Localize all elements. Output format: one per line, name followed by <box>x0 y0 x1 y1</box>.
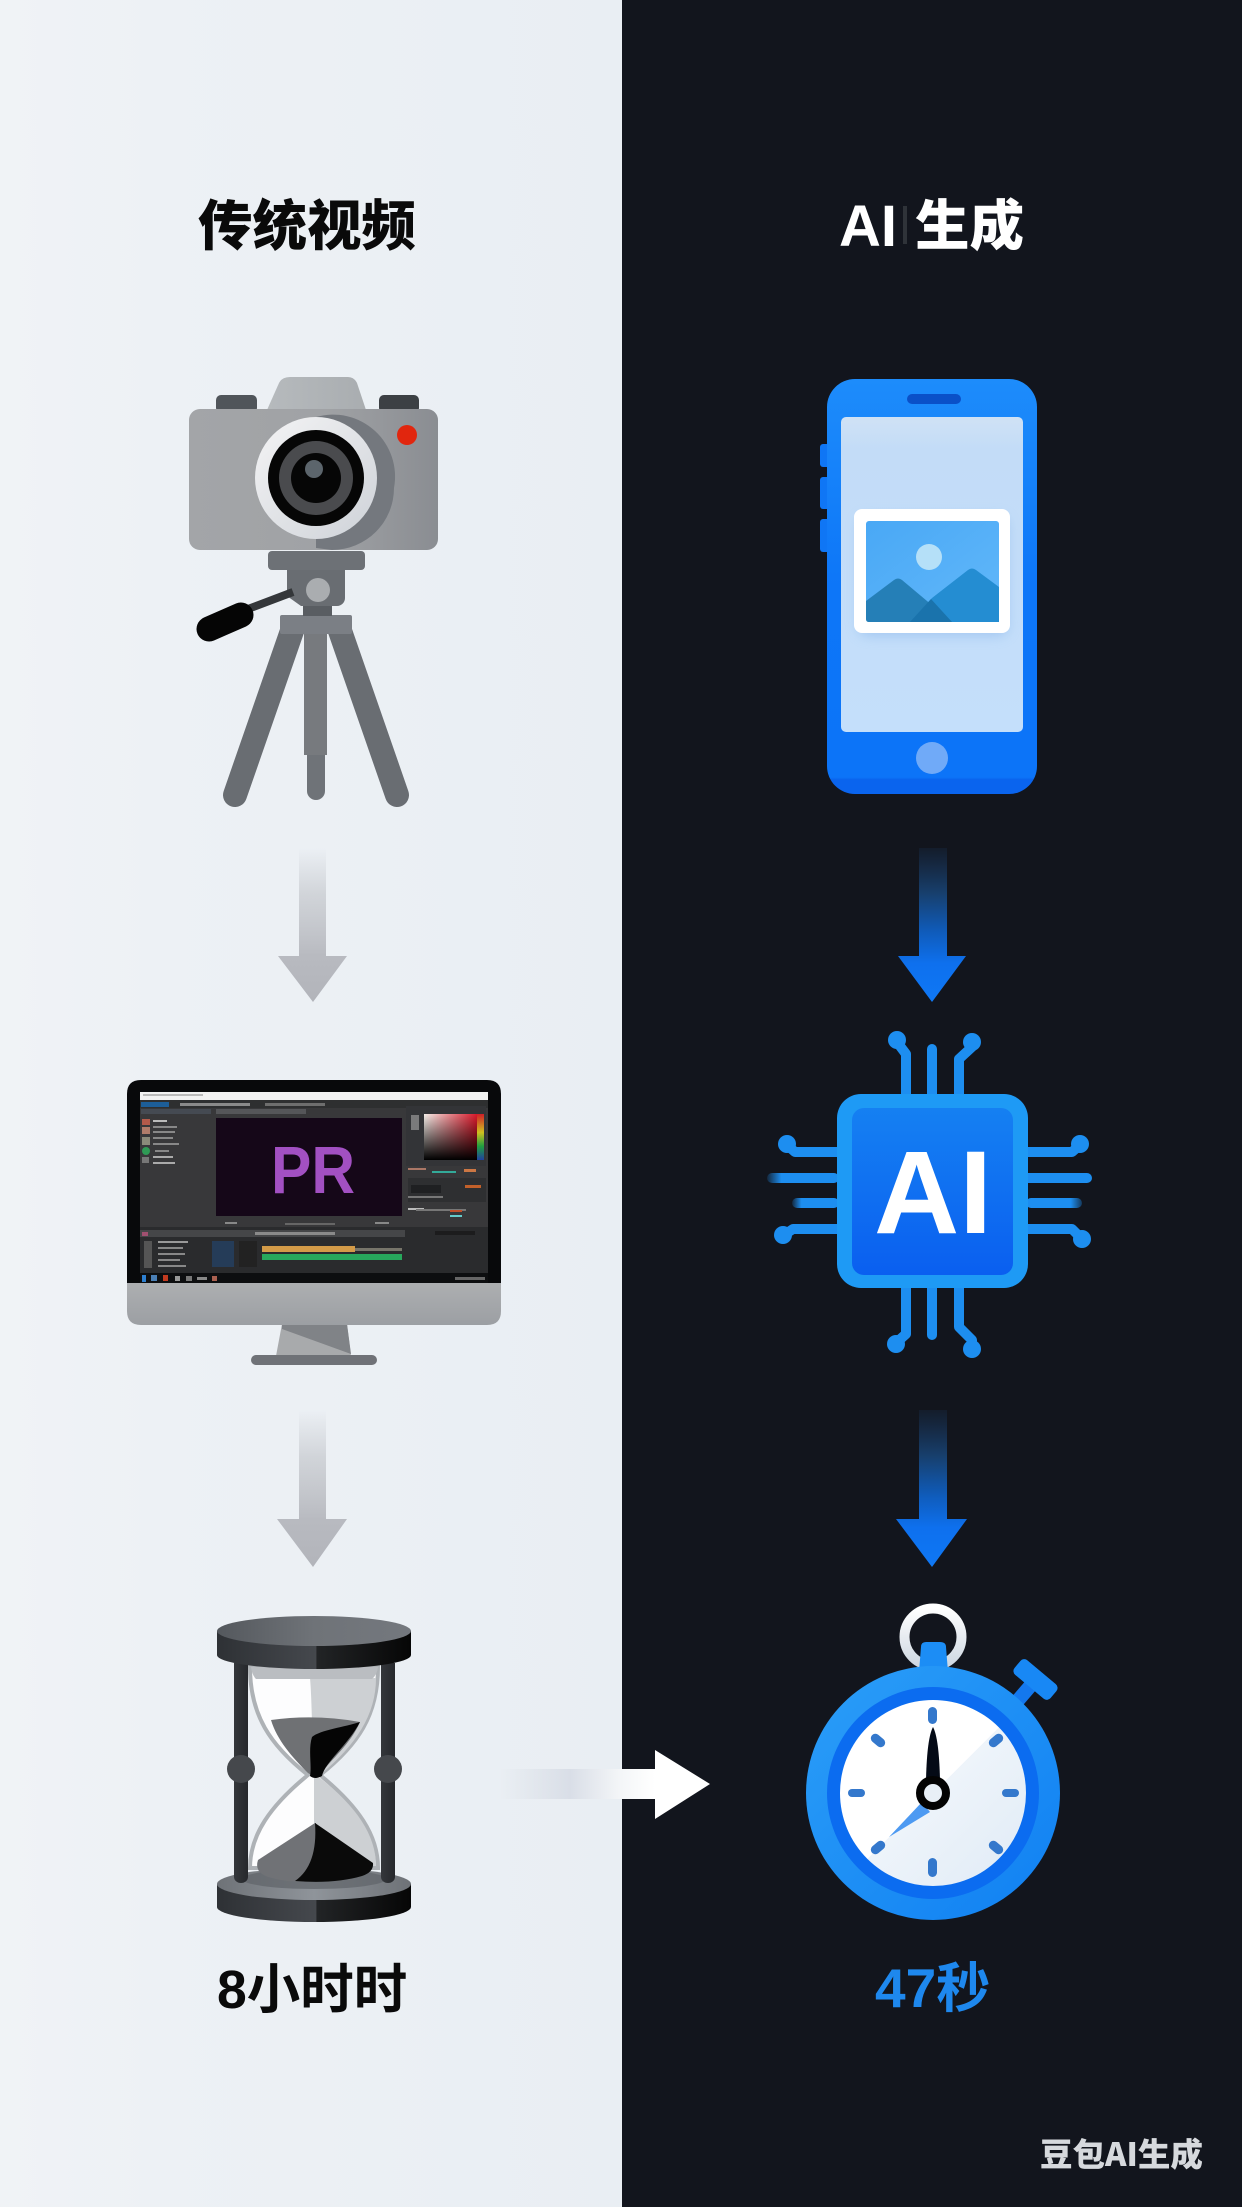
viewfinder hump and dials <box>216 377 419 413</box>
arrow: traditional to AI comparison <box>500 1750 710 1819</box>
icon: hourglass <box>217 1616 411 1922</box>
timeline <box>140 1227 488 1273</box>
phone screen <box>841 417 1023 732</box>
glass bulbs <box>250 1667 378 1868</box>
posts <box>227 1663 402 1883</box>
dial face <box>840 1700 1026 1886</box>
centre pivot <box>920 1780 946 1806</box>
software screen <box>140 1092 488 1283</box>
minute hand <box>926 1727 940 1780</box>
left project panel <box>141 1109 211 1164</box>
icon: camera on tripod <box>189 377 438 800</box>
circuit traces <box>784 1042 1087 1348</box>
camera body <box>189 409 438 550</box>
colour panel <box>406 1106 486 1217</box>
photo card <box>854 509 1010 636</box>
pan handle <box>209 592 293 629</box>
watch case <box>806 1666 1060 1920</box>
crown <box>919 1642 948 1672</box>
panel: traditional video background <box>0 0 622 2207</box>
arrow: camera to editing <box>278 848 347 1002</box>
heading: AI generation: AI <box>839 194 897 259</box>
heading: AI generation <box>839 182 1024 261</box>
top disc <box>217 1616 411 1669</box>
monitor bezel <box>127 1080 501 1283</box>
hour ticks <box>848 1707 1019 1877</box>
upper sand <box>271 1717 360 1778</box>
lower sand <box>257 1823 373 1882</box>
side buttons <box>820 444 830 552</box>
chip label: AI <box>874 1127 992 1259</box>
taskbar <box>140 1273 488 1283</box>
hanging loop <box>904 1608 962 1666</box>
home button <box>916 742 948 774</box>
heading: AI generation: 生成 <box>915 182 1024 261</box>
lens <box>255 415 395 550</box>
heading: traditional video: 传统视频 <box>198 182 416 261</box>
arrow: editing to waiting <box>277 1410 347 1567</box>
icon: monitor with editing software <box>127 1080 501 1365</box>
side button <box>1008 1657 1060 1712</box>
tripod legs <box>235 615 397 800</box>
chip body <box>837 1094 1028 1288</box>
speaker <box>907 394 961 404</box>
panel: AI generation background <box>622 0 1242 2207</box>
video preview: PR <box>271 1133 355 1208</box>
base disc <box>217 1868 411 1922</box>
label: 8 hours: 8小时时 <box>217 1947 407 2024</box>
arrow: AI chip to stopwatch <box>896 1410 967 1567</box>
monitor chin <box>127 1280 501 1325</box>
record light <box>397 425 417 445</box>
icon: smartphone with photo <box>820 379 1037 794</box>
phone body <box>827 379 1037 794</box>
label: 47 seconds: 47秒 <box>875 1944 990 2023</box>
icon: AI chip <box>767 1031 1091 1358</box>
trace end dots <box>774 1031 1091 1358</box>
inner ring <box>827 1687 1039 1899</box>
watermark: 豆包AI生成 <box>1040 2129 1203 2176</box>
stand <box>251 1324 377 1365</box>
icon: stopwatch <box>806 1608 1060 1920</box>
second hand <box>889 1802 930 1837</box>
arrow: phone to AI chip <box>898 848 966 1002</box>
tripod head <box>268 551 365 616</box>
video preview <box>216 1118 402 1216</box>
